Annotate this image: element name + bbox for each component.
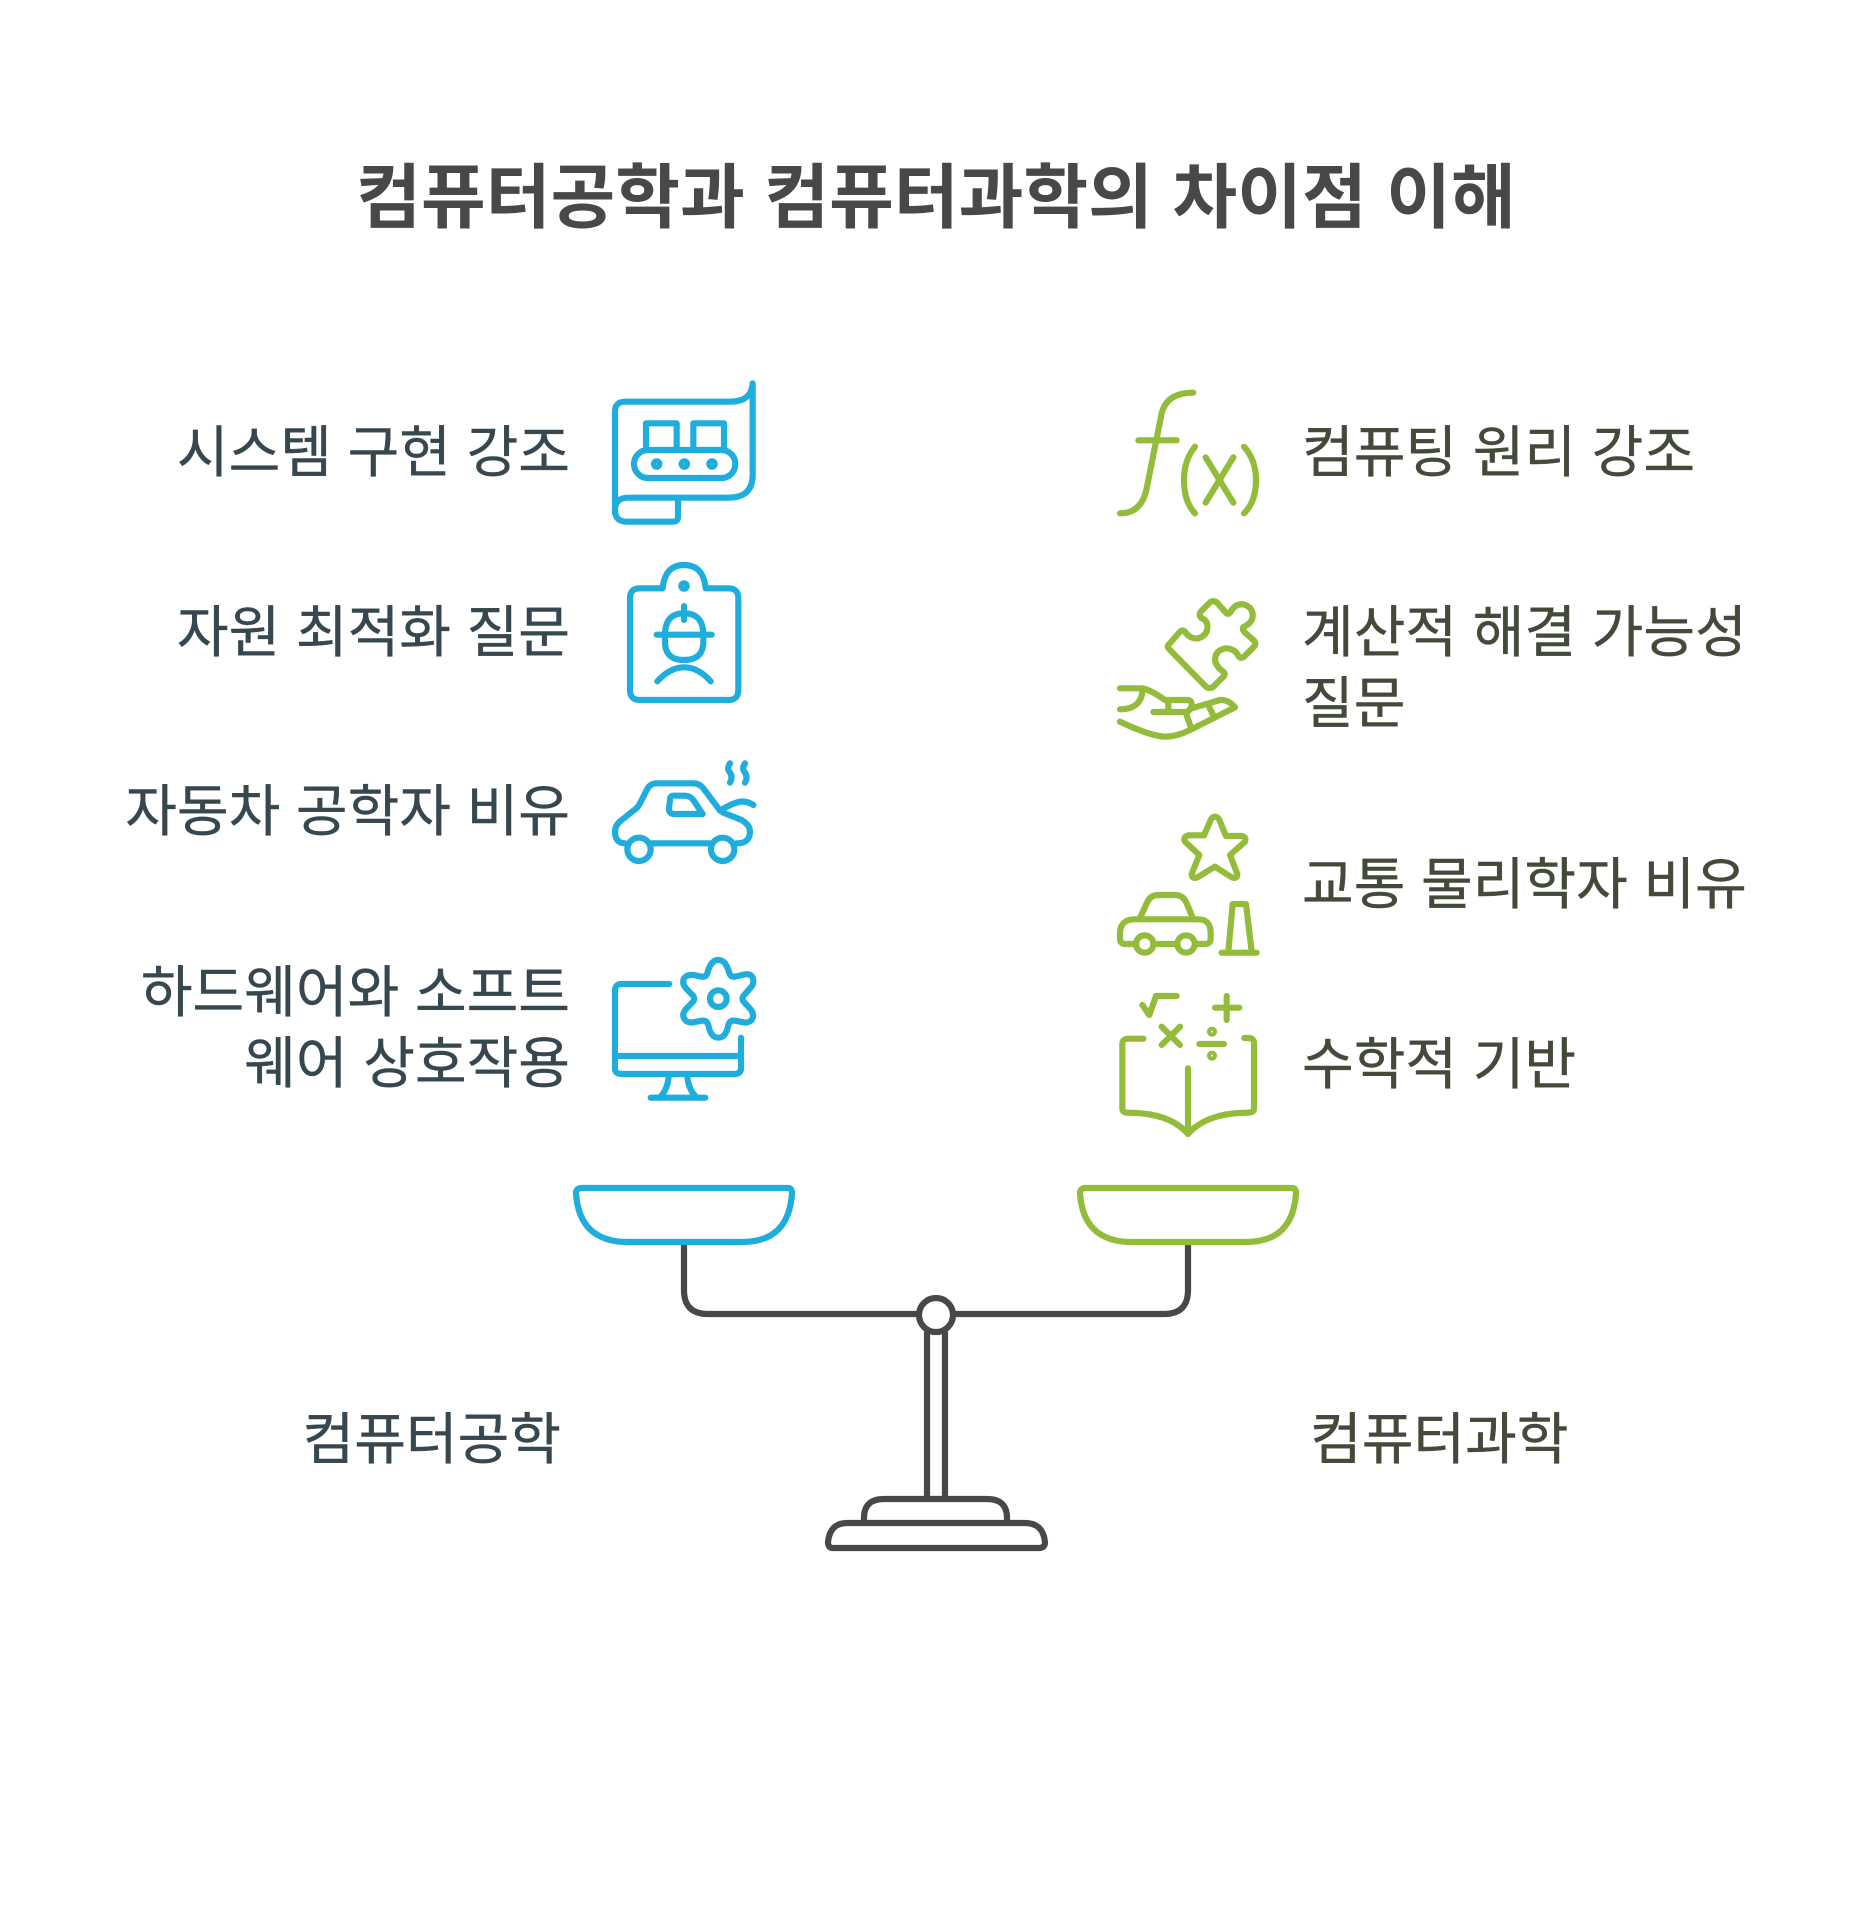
icon: blueprint conveyor belt (615, 383, 753, 522)
icon: f(x) function (1120, 393, 1256, 513)
left label: 자동차 공학자 비유: 자동차 공학자 비유 (125, 780, 570, 843)
base (828, 1499, 1045, 1548)
pivot (919, 1298, 953, 1332)
right label: 컴퓨팅 원리 강조: 컴퓨팅 원리 강조 (1302, 421, 1695, 484)
left label: 하드웨어와 소프트웨어 상호작용: 하드웨어와 소프트 (141, 961, 570, 1024)
icon: car, traffic cone and star (1120, 817, 1257, 953)
balance scale (576, 1188, 1296, 1548)
right label: 교통 물리학자 비유: 교통 물리학자 비유 (1302, 853, 1747, 916)
left category label: 컴퓨터공학: 컴퓨터공학 (303, 1408, 561, 1471)
left label: 시스템 구현 강조: 시스템 구현 강조 (177, 421, 570, 484)
icon: monitor with gear (615, 960, 753, 1098)
right category label: 컴퓨터과학: 컴퓨터과학 (1310, 1408, 1568, 1471)
beam (684, 1244, 1188, 1314)
right pan (1080, 1188, 1296, 1242)
right label: 수학적 기반: 수학적 기반 (1302, 1033, 1576, 1096)
icon: hand holding puzzle piece (1120, 601, 1255, 737)
icon: open book with math symbols (1122, 996, 1254, 1134)
icon: engineer ID badge (630, 565, 738, 700)
right label: 계산적 해결 가능성 질문: 질문 (1302, 672, 1405, 735)
post (927, 1333, 945, 1498)
right label: 계산적 해결 가능성 질문 (1302, 601, 1747, 735)
left label: 하드웨어와 소프트웨어 상호작용 (141, 961, 570, 1095)
title: 컴퓨터공학과 컴퓨터과학의 차이점 이해 (356, 158, 1516, 237)
left pan (576, 1188, 792, 1242)
left label: 하드웨어와 소프트웨어 상호작용: 웨어 상호작용 (244, 1032, 570, 1095)
left label: 자원 최적화 질문: 자원 최적화 질문 (177, 601, 570, 664)
right label: 계산적 해결 가능성 질문: 계산적 해결 가능성 (1302, 601, 1747, 664)
icon: car with steaming hood (615, 763, 753, 861)
